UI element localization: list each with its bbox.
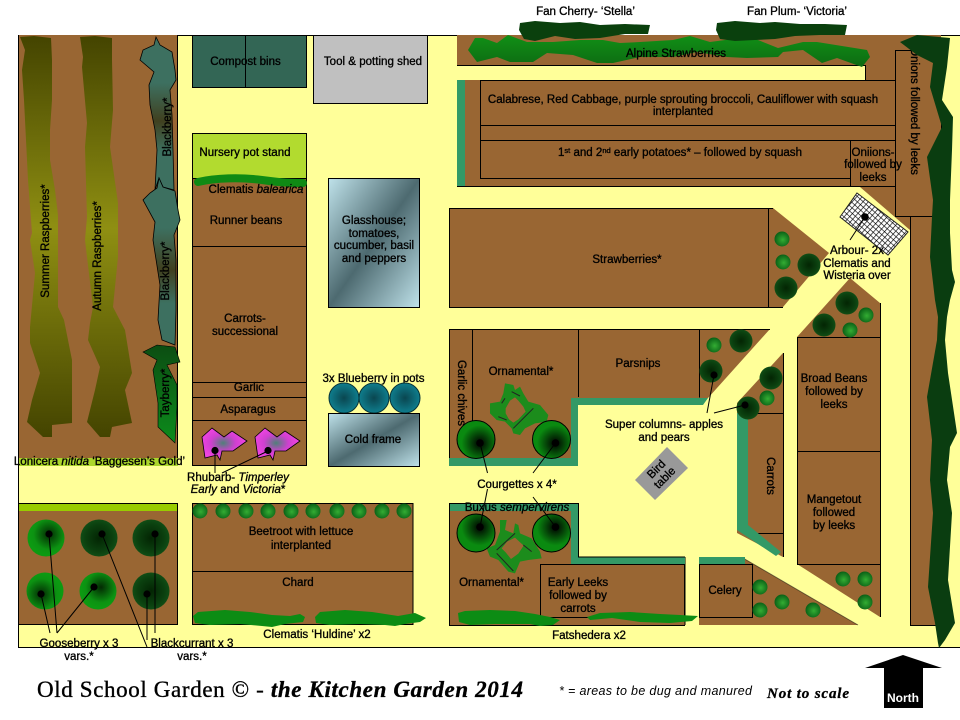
scale note: Not to scale xyxy=(766,686,849,702)
gooseberry bushes xyxy=(26,520,116,610)
panel: celery bed xyxy=(699,557,858,625)
edging strip xyxy=(737,413,781,556)
label: bird table: table xyxy=(652,465,678,491)
box knot xyxy=(487,520,542,573)
label: onions: Onions followed by leeks xyxy=(908,47,920,175)
label: garlic chives: Garlic chives xyxy=(455,360,467,426)
edging strip xyxy=(457,80,465,186)
bottom shrubs xyxy=(836,572,872,610)
brassica bed xyxy=(480,80,896,126)
label: potatoes: nd xyxy=(602,146,611,155)
label: carrots: Carrots- xyxy=(224,313,266,325)
courgette plants xyxy=(457,420,570,458)
carrot corner shrubs xyxy=(714,366,782,420)
panel: cold frame xyxy=(328,414,420,466)
blackberry plant 1 xyxy=(140,37,176,190)
label: gooseberry: Gooseberry x 3 xyxy=(40,638,118,650)
label: super columns: Super columns- apples xyxy=(605,419,723,431)
hedge: Lonicera strip xyxy=(19,458,178,466)
label: broad beans: Broad Beans xyxy=(801,373,867,385)
label: ornamental: Ornamental* xyxy=(489,366,554,378)
label: blackcurrant: vars.* xyxy=(177,651,207,663)
label: strawberries: Strawberries* xyxy=(592,254,662,266)
plant pointers xyxy=(37,530,159,647)
label: potatoes: early potatoes* – followed by squash xyxy=(611,147,802,159)
label: garlic: Garlic xyxy=(234,382,264,394)
panel: north-east perimeter beds xyxy=(457,35,942,626)
label: fan plum: Fan Plum- ‘Victoria’ xyxy=(747,6,847,18)
nursery pot stand xyxy=(192,134,306,178)
panel: strawberries bed xyxy=(449,208,829,308)
panel: north ornamental and parsnip beds xyxy=(449,329,770,473)
courgette plants xyxy=(457,514,570,552)
edging strip xyxy=(699,557,745,564)
label: parsnips: Parsnips xyxy=(616,358,661,370)
celery plot xyxy=(700,564,752,618)
label: rhubarb: Early xyxy=(191,484,220,496)
label: glasshouse: and peppers xyxy=(342,253,406,265)
label: arbour: Clematis and xyxy=(823,258,891,270)
fan plum plant xyxy=(716,21,847,41)
label: blackberry 2: Blackberry* xyxy=(160,241,172,301)
alpine strawberries plants xyxy=(468,35,870,67)
celery shrubs xyxy=(752,580,820,618)
label: summer raspberries: Summer Raspberries* xyxy=(40,184,52,298)
label: fatshedera: Fatshedera x2 xyxy=(552,630,626,642)
label: blackberry: Blackberry* xyxy=(162,97,174,157)
title: Old School Garden © - the Kitchen Garden 2014 xyxy=(37,677,523,702)
label: chard: Chard xyxy=(282,577,314,589)
label: cold frame: Cold frame xyxy=(345,434,401,446)
panel: raspberry and cane fruit bed xyxy=(18,35,180,466)
label: mangetout: followed xyxy=(813,507,855,519)
clematis Huldine plants xyxy=(193,610,426,627)
arbour marker xyxy=(850,213,869,240)
beetroot row shrubs xyxy=(192,504,412,518)
blackberry plant 2 xyxy=(143,178,180,345)
label: mangetout: Mangetout xyxy=(807,494,861,506)
icon: blueberry pots xyxy=(329,383,420,413)
label: alpine strawberries: Alpine Strawberries xyxy=(626,48,726,60)
potato bed xyxy=(480,125,895,186)
clematis balearica plant xyxy=(198,178,303,183)
label: bird table: Bird xyxy=(645,458,668,481)
summer raspberries row xyxy=(20,36,72,437)
label: autumn raspberries: Autumn Raspberries* xyxy=(92,201,104,311)
label: ornamental: Ornamental* xyxy=(459,577,524,589)
panel: beetroot and chard bed xyxy=(192,504,426,627)
label: potatoes: and 2 xyxy=(570,147,602,159)
blackcurrant bushes xyxy=(80,520,170,610)
fan cherry plant xyxy=(519,21,650,41)
panel: carrots bed xyxy=(714,353,784,557)
label: gooseberry: vars.* xyxy=(64,651,94,663)
label: early leeks: Early Leeks xyxy=(548,577,608,589)
label: buxus: Buxus sempervirens xyxy=(465,502,570,514)
early leeks bed xyxy=(540,564,684,618)
label: onions in small bed: Oniions- xyxy=(852,147,894,159)
panel: tool and potting shed xyxy=(314,36,428,104)
brown bed block xyxy=(192,178,306,466)
label: blackcurrant: Blackcurrant x 3 xyxy=(151,638,233,650)
autumn raspberries row xyxy=(80,36,132,437)
label: nursery pot stand: Nursery pot stand xyxy=(199,147,291,159)
panel: central west vegetable beds xyxy=(192,134,307,473)
label: celery: Celery xyxy=(708,585,742,597)
label: onions in small bed: followed by xyxy=(844,159,902,171)
edging strips xyxy=(450,504,685,564)
label: broad beans: followed by xyxy=(805,386,863,398)
label: glasshouse: tomatoes, xyxy=(349,228,399,240)
panel: south-west fruit bed xyxy=(18,504,178,647)
label: arbour: Wisteria over xyxy=(823,270,891,282)
edging strip xyxy=(19,504,177,511)
icon: arbour lattice xyxy=(840,193,908,255)
onion bed xyxy=(896,47,942,216)
label: broad beans: leeks xyxy=(821,399,848,411)
label: brassicas: Calabrese, Red Cabbage, purple sprouting broccoli, Cauliflower with squash xyxy=(488,94,878,106)
label: blueberry: 3x Blueberry in pots xyxy=(322,373,425,385)
label: potatoes: 1 xyxy=(558,147,564,159)
label: shed: Tool & potting shed xyxy=(324,56,422,68)
label: runner beans: Runner beans xyxy=(210,215,282,227)
box knot xyxy=(490,383,548,435)
panel: south ornamental and leeks beds xyxy=(449,489,698,626)
rhubarb plant 1 xyxy=(202,428,247,460)
label: rhubarb: Rhubarb- Timperley xyxy=(187,472,289,484)
footnote: * = areas to be dug and manured xyxy=(559,684,753,698)
label: carrots: successional xyxy=(212,326,278,338)
parsnip corner shrubs xyxy=(700,330,752,413)
strawberry shrubs xyxy=(774,232,820,300)
courgette markers xyxy=(476,439,559,473)
label: early leeks: carrots xyxy=(560,603,596,615)
label: glasshouse: cucumber, basil xyxy=(334,240,414,252)
tayberry plant xyxy=(143,345,180,443)
label: super columns: and pears xyxy=(638,432,690,444)
label: courgettes: Courgettes x 4* xyxy=(477,479,557,491)
label: early leeks: followed by xyxy=(549,590,607,602)
label: glasshouse: Glasshouse; xyxy=(342,215,406,227)
label: clematis balearica: Clematis balearica xyxy=(209,184,304,196)
label: fan cherry: Fan Cherry- ‘Stella’ xyxy=(536,6,635,18)
icon: north arrow xyxy=(865,655,942,708)
label: Lonicera nitida: Lonicera nitida ‘Baggesen’s Gold’ xyxy=(14,456,185,468)
top shrubs xyxy=(812,292,874,338)
label: carrots: Carrots xyxy=(764,457,776,495)
label: arbour: Arbour- 2x xyxy=(830,245,884,257)
right boundary hedge xyxy=(900,35,957,648)
label: mangetout: by leeks xyxy=(813,520,855,532)
label: clematis Huldine: Clematis ‘Huldine’ x2 xyxy=(263,629,371,641)
label: beetroot: Beetroot with lettuce xyxy=(249,526,353,538)
edging strip xyxy=(449,398,708,466)
rhubarb plant 2 xyxy=(255,428,300,460)
fatshedera plants xyxy=(458,610,698,626)
label: brassicas: interplanted xyxy=(653,106,713,118)
label: rhubarb: and Victoria* xyxy=(220,484,285,496)
panel: glasshouse xyxy=(328,178,420,308)
label: north: North xyxy=(887,691,919,705)
panel: compost bins xyxy=(192,35,306,88)
label: potatoes: st xyxy=(564,146,571,155)
label: compost bins: Compost bins xyxy=(210,56,281,68)
label: beetroot: interplanted xyxy=(271,540,331,552)
courgette markers xyxy=(476,489,559,531)
label: onions in small bed: leeks xyxy=(860,172,887,184)
panel: broad beans and mangetout beds xyxy=(797,278,880,617)
label: tayberry: Tayberry* xyxy=(160,368,172,417)
icon: bird table xyxy=(635,447,688,500)
label: asparagus: Asparagus xyxy=(220,404,276,416)
rhubarb markers xyxy=(211,447,272,473)
